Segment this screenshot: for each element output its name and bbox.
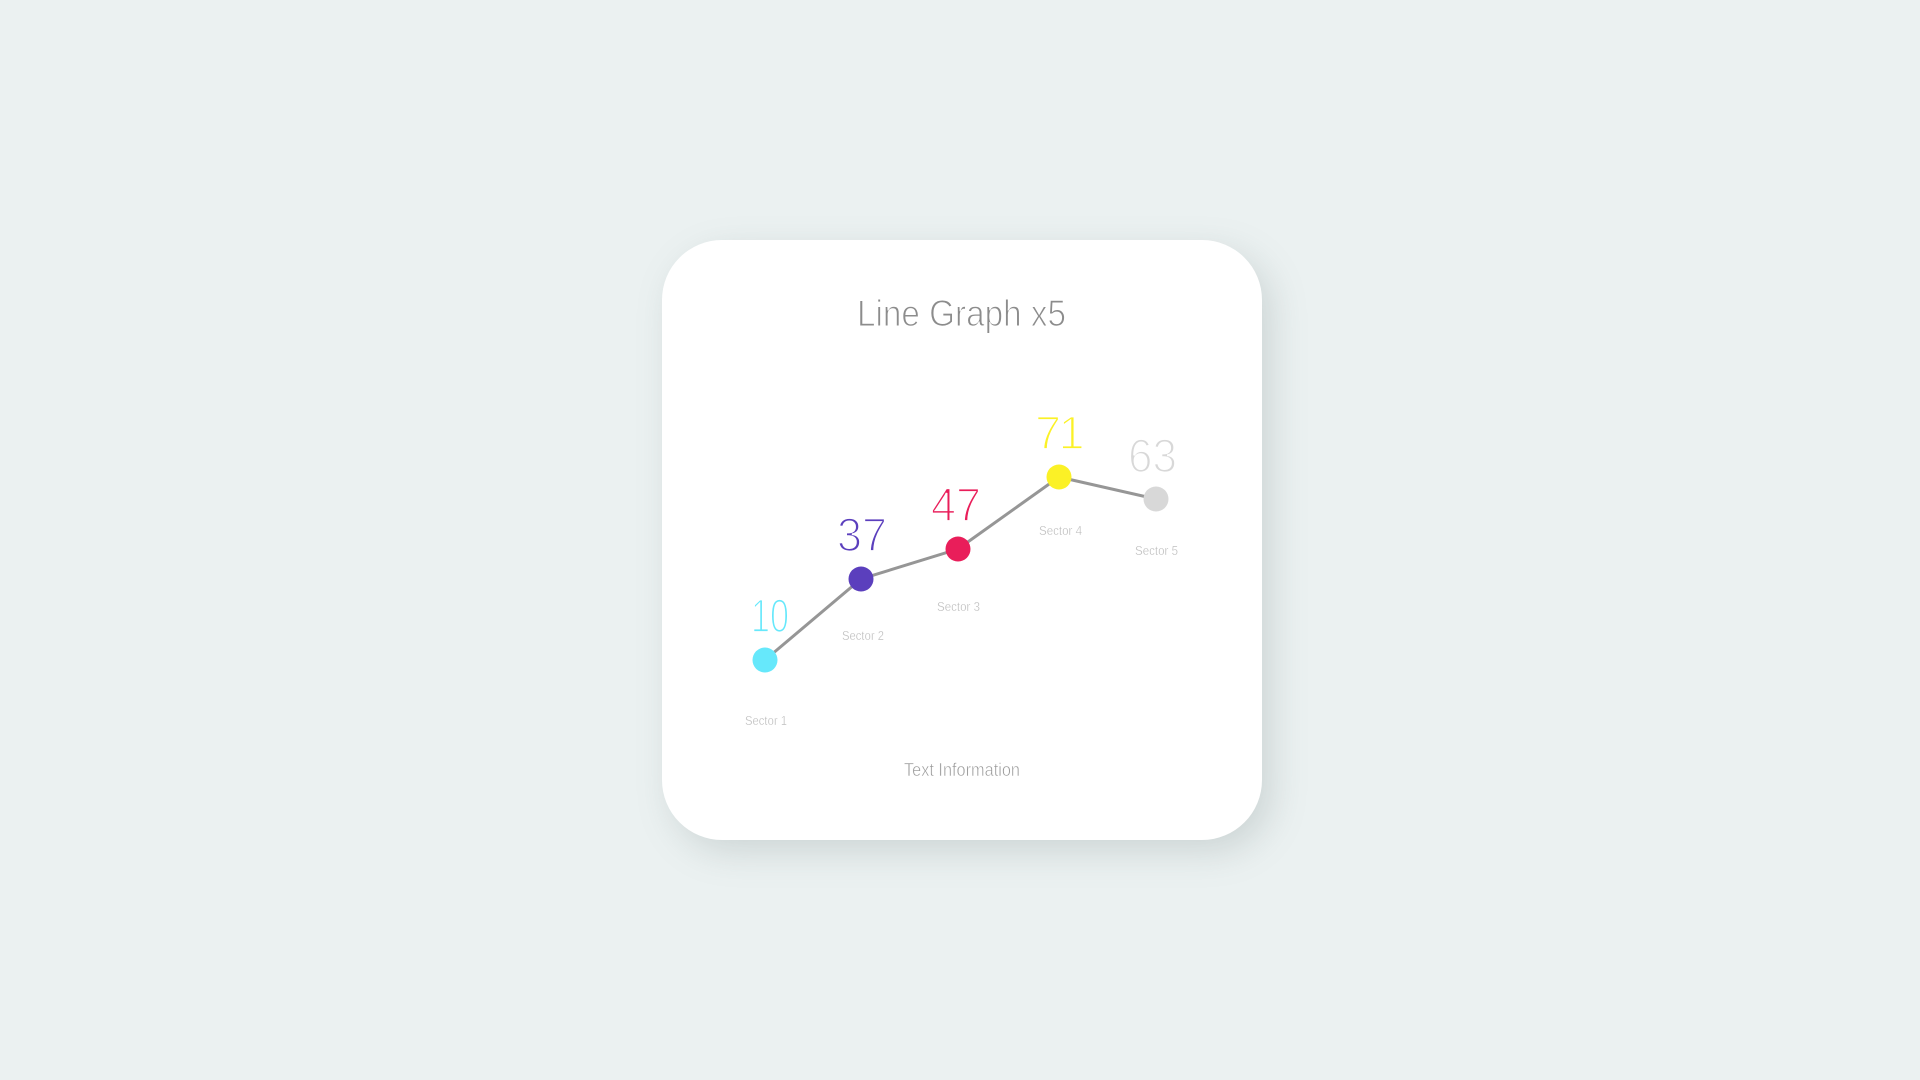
data point: sector 2: [837, 508, 887, 643]
data point: sector 2: Sector 2: [842, 628, 884, 643]
data point: sector 1: Sector 1: [745, 713, 787, 728]
data point: sector 4: 71: [1035, 406, 1085, 459]
data point: sector 5: Sector 5: [1135, 543, 1178, 558]
data point: sector 3: 47: [931, 478, 981, 531]
panel: card: [662, 240, 1262, 840]
data point: sector 3: Sector 3: [937, 599, 980, 614]
caption: text information: Text Information: [904, 760, 1020, 780]
data point: sector 5: [1128, 429, 1178, 558]
data point: sector 4: Sector 4: [1039, 523, 1082, 538]
data point: sector 1: 10: [751, 589, 789, 642]
data point: sector 1: [745, 589, 789, 728]
connecting line: [765, 477, 1156, 660]
data point: sector 2: 37: [837, 508, 887, 561]
data point: sector 3: [931, 478, 981, 614]
data point: sector 5: 63: [1128, 429, 1177, 482]
title: Line Graph x5: [857, 293, 1066, 334]
data point: sector 4: [1035, 406, 1085, 538]
